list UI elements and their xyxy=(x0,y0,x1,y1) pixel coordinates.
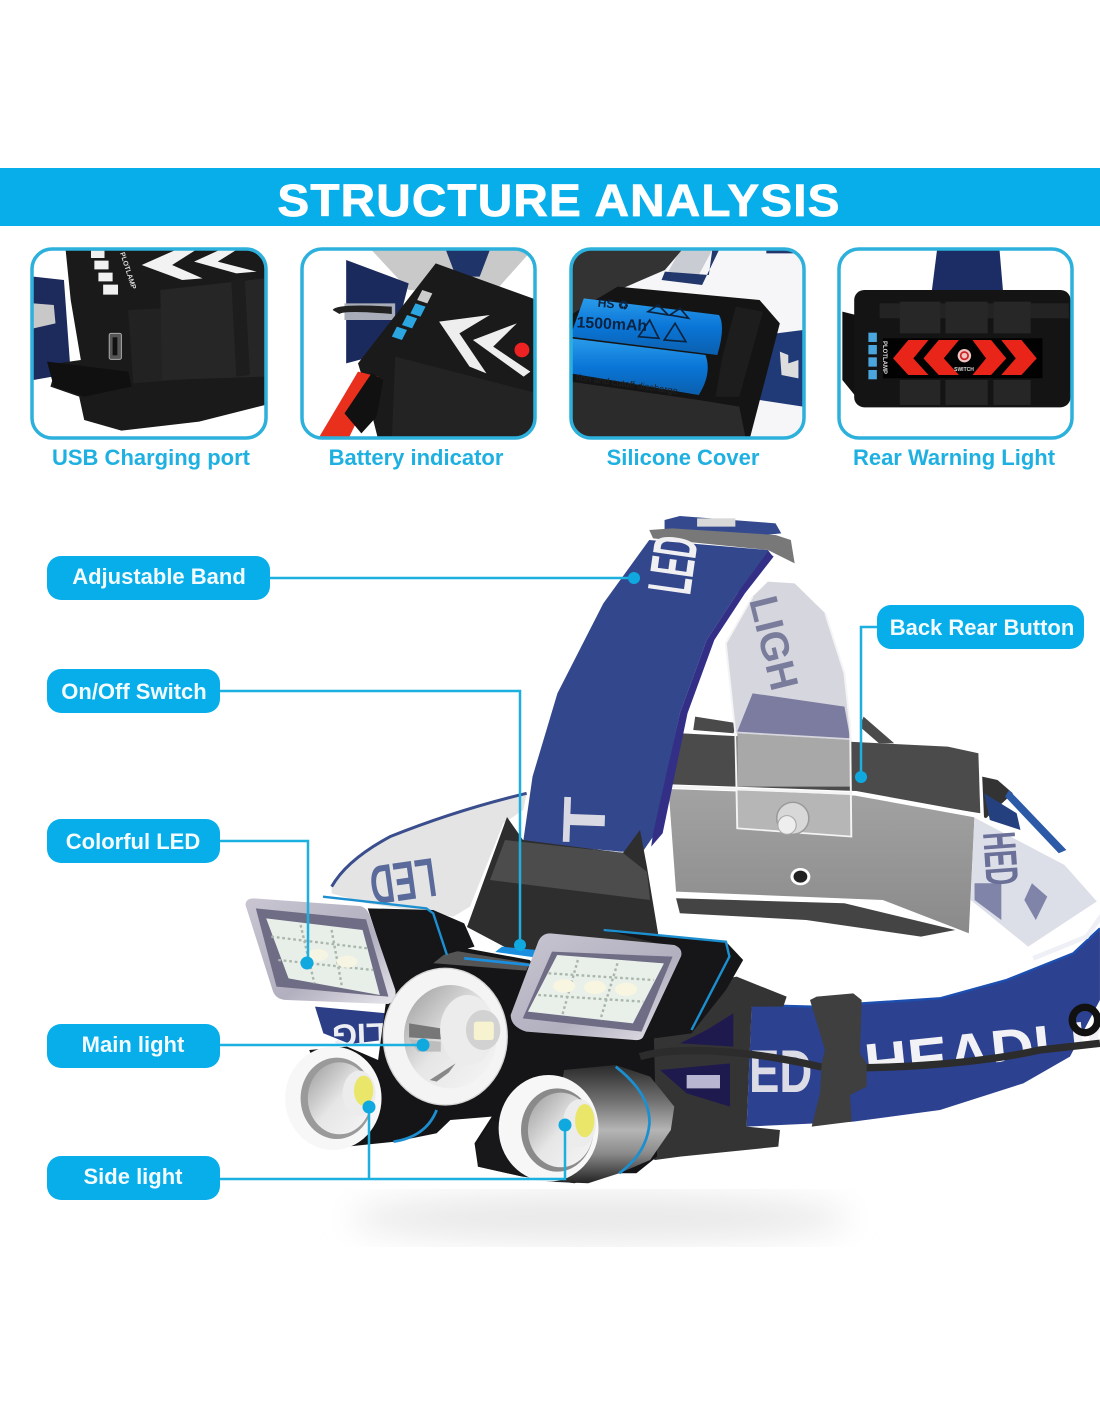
icon: colorful LED panel right xyxy=(511,930,743,1040)
clear right band xyxy=(971,815,1099,947)
title banner xyxy=(0,168,1100,226)
right band lettering: HED xyxy=(973,830,1029,887)
panel: silicone cover: 1500mAh xyxy=(576,314,648,335)
strap lettering ED: ED xyxy=(749,1039,812,1106)
caption: USB: USB Charging port xyxy=(52,445,251,470)
clear bracket strip xyxy=(726,582,851,740)
icon: side light left xyxy=(300,1047,382,1147)
panel: rear warning light: PLOTLAMP xyxy=(881,341,887,374)
callout: Colorful LED: Colorful LED xyxy=(66,829,200,854)
front strap xyxy=(746,914,1100,1127)
base plate xyxy=(668,787,975,933)
panel: USB charging port: PLOTLAMP xyxy=(118,251,137,291)
left strap lettering: LIG xyxy=(331,1016,386,1054)
left strap xyxy=(315,1007,387,1044)
panel: silicone cover: tion and cutoff discharge xyxy=(575,371,679,396)
callout: On/Off Switch xyxy=(47,669,526,951)
callout: Side light: Side light xyxy=(84,1164,183,1189)
callout: Main light: Main light xyxy=(82,1032,185,1057)
panel: battery indicator xyxy=(301,249,537,440)
bolt xyxy=(777,802,809,834)
band lettering T: T xyxy=(550,795,619,844)
product photo: headlamp xyxy=(245,516,1100,1242)
band lettering LED: LED xyxy=(635,532,712,598)
callout: Adjustable Band: Adjustable Band xyxy=(72,564,246,589)
panel: USB charging port xyxy=(32,249,267,439)
hole xyxy=(790,868,810,885)
icon: side light right xyxy=(476,1065,674,1183)
icon: colorful LED panel left xyxy=(245,897,475,1004)
panel: silicone cover: HS ♻ xyxy=(597,296,629,313)
caption: battery: Battery indicator xyxy=(329,445,504,470)
back band ring xyxy=(332,793,527,917)
caption: silicone: Silicone Cover xyxy=(607,445,760,470)
callout: Main light xyxy=(47,1024,430,1068)
battery box and rear hardware xyxy=(668,582,1099,947)
caption: rear warning: Rear Warning Light xyxy=(853,445,1056,470)
cable and clip xyxy=(640,993,1100,1127)
back band lettering: LED xyxy=(366,846,440,916)
panel: silicone cover xyxy=(570,249,807,440)
title: STRUCTURE ANALYSIS xyxy=(277,175,841,226)
lower shadow arc xyxy=(676,898,955,937)
bracket lettering: LIGH xyxy=(740,592,806,695)
callout: On/Off Switch: On/Off Switch xyxy=(61,679,207,704)
adjustable top band xyxy=(521,516,795,858)
callout: Side light xyxy=(47,1100,572,1200)
panel: rear warning light xyxy=(837,249,1074,439)
callout: Colorful LED xyxy=(47,819,314,970)
icon: main light lens xyxy=(383,968,507,1105)
callout: Adjustable Band xyxy=(47,556,640,600)
callout: Back Rear Button: Back Rear Button xyxy=(890,615,1074,640)
callout: Back Rear Button xyxy=(855,605,1084,783)
lamp body and brackets xyxy=(654,976,787,1160)
panel: rear warning light: SWITCH xyxy=(954,367,974,373)
